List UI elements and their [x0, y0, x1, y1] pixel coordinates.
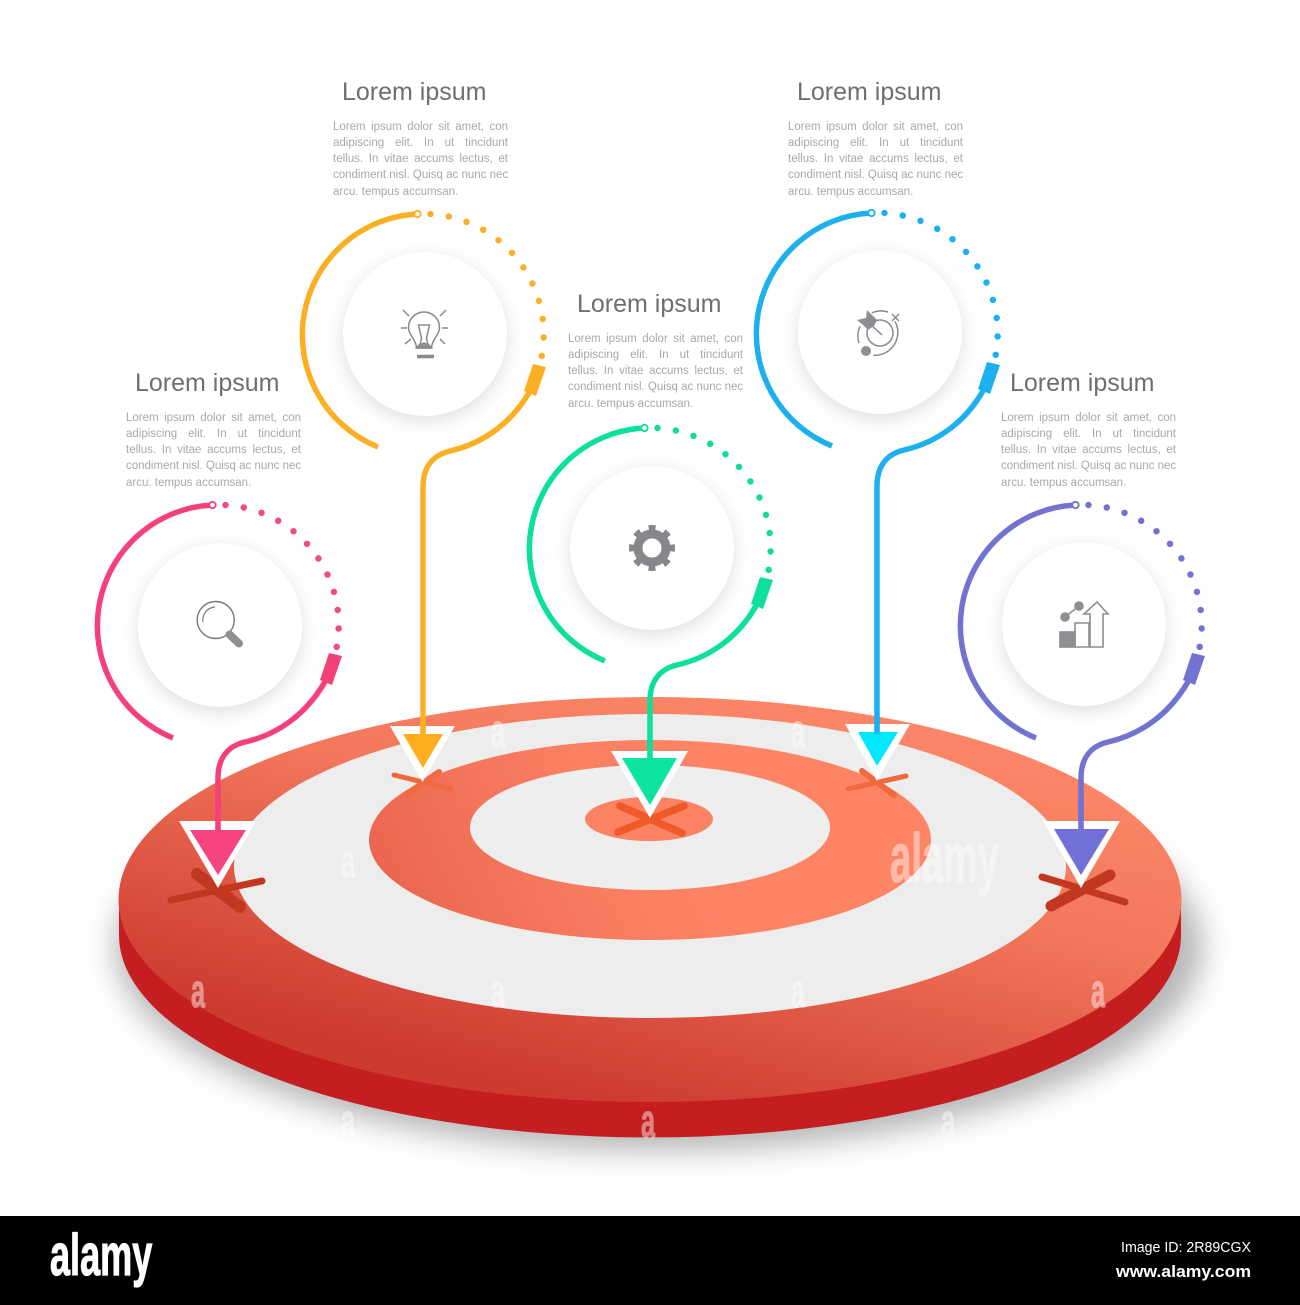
crosses on target	[171, 771, 1125, 907]
disc ground shadow	[115, 743, 1203, 1151]
dotted arc	[884, 213, 998, 356]
footer logo: alamy	[50, 1223, 152, 1288]
watermarks on disc: a	[641, 1096, 656, 1148]
text block: idea: adipiscing elit. In ut tincidunt	[333, 137, 508, 149]
text block: idea: condiment nisl. Quisq ac nunc nec	[333, 169, 508, 181]
text block: goal: Lorem ipsum dolor sit amet, con	[788, 120, 963, 132]
thick stub	[320, 653, 342, 685]
watermarks on disc: a	[941, 1096, 956, 1148]
icon: growth chart	[1060, 602, 1108, 647]
text block: goal: condiment nisl. Quisq ac nunc nec	[788, 169, 963, 181]
dotted arc	[430, 214, 544, 357]
watermarks on disc: a	[191, 966, 206, 1018]
website: www.alamy.com	[1115, 1262, 1251, 1281]
ring arc	[529, 428, 644, 661]
text block: settings: arcu. tempus accumsan.	[568, 398, 693, 410]
bullseye	[585, 797, 713, 841]
circle: settings	[570, 466, 734, 630]
thick stub	[751, 577, 773, 609]
cross: purple	[1042, 875, 1125, 906]
circle: idea	[343, 252, 507, 416]
text block: growth: adipiscing elit. In ut tincidunt	[1001, 428, 1176, 440]
pointer: orange	[302, 211, 546, 782]
text block: idea: tellus. In vitae accums lectus, et	[333, 153, 508, 165]
watermarks on disc: a	[1091, 966, 1106, 1018]
ring start node	[868, 210, 875, 216]
text block: search: adipiscing elit. In ut tincidunt	[126, 428, 301, 440]
text block: search: tellus. In vitae accums lectus, et	[126, 444, 301, 456]
pointer: purple	[960, 502, 1205, 888]
dotted arc	[658, 428, 771, 571]
image id: Image ID: 2R89CGX	[1121, 1239, 1251, 1256]
pointer: green	[529, 425, 773, 818]
circle shadow: goal	[797, 254, 963, 420]
text: Lorem ipsum	[135, 369, 280, 397]
watermarks on disc: a	[341, 1096, 356, 1148]
ring start node	[641, 425, 648, 431]
ring arc	[302, 214, 417, 447]
ring arc	[756, 213, 871, 446]
text: Lorem ipsum	[577, 290, 722, 318]
text block: search: condiment nisl. Quisq ac nunc nec	[126, 460, 301, 472]
text block: growth: Lorem ipsum dolor sit amet, con	[1001, 412, 1176, 424]
arrowhead	[179, 800, 256, 888]
watermarks on disc: a	[791, 706, 806, 758]
white ring	[234, 714, 1066, 1018]
text block: growth: condiment nisl. Quisq ac nunc nec	[1001, 460, 1176, 472]
circle: growth	[1002, 542, 1166, 706]
text block: settings: tellus. In vitae accums lectus, et	[568, 365, 743, 377]
connector line	[877, 389, 984, 735]
icon: magnifier	[197, 602, 239, 644]
ring start node	[1072, 502, 1079, 508]
disc outer ring	[118, 697, 1182, 1102]
connector line	[650, 604, 757, 765]
text block: search: arcu. tempus accumsan.	[126, 476, 251, 488]
target disc	[115, 697, 1203, 1151]
arrowhead	[845, 718, 910, 781]
icon: gear	[628, 524, 676, 572]
text block: idea: arcu. tempus accumsan.	[333, 186, 458, 198]
text block: goal: tellus. In vitae accums lectus, et	[788, 153, 963, 165]
watermarks on disc: alamy	[890, 819, 999, 897]
text block: settings: adipiscing elit. In ut tincidunt	[568, 349, 743, 361]
text block: settings: Lorem ipsum dolor sit amet, con	[568, 332, 743, 344]
connector line	[218, 680, 326, 835]
ring start node	[414, 211, 421, 217]
footer bar	[0, 1216, 1300, 1305]
text block: settings: condiment nisl. Quisq ac nunc nec	[568, 381, 743, 393]
circle shadow: idea	[342, 256, 508, 422]
arrowhead	[1043, 800, 1120, 888]
watermarks on disc	[191, 706, 1106, 1148]
thick stub	[524, 364, 546, 396]
pointer: pink	[97, 502, 342, 888]
text block: settings	[568, 290, 743, 410]
cross: pink	[171, 874, 262, 907]
text block: growth	[1001, 369, 1176, 488]
text block: idea: Lorem ipsum dolor sit amet, con	[333, 120, 508, 132]
circle shadow: settings	[569, 470, 735, 636]
text block: search: Lorem ipsum dolor sit amet, con	[126, 412, 301, 424]
icon: light bulb	[401, 310, 448, 356]
disc side wall	[119, 899, 1181, 1137]
text: Lorem ipsum	[342, 78, 486, 106]
text block: growth: arcu. tempus accumsan.	[1001, 476, 1126, 488]
watermarks on disc: a	[341, 836, 356, 888]
thick stub	[978, 362, 1000, 394]
text block: goal: adipiscing elit. In ut tincidunt	[788, 137, 963, 149]
circle shadow: search	[137, 547, 303, 713]
text: Lorem ipsum	[797, 78, 942, 106]
white circles	[137, 250, 1167, 713]
thick stub	[1183, 653, 1205, 685]
arrowhead	[611, 740, 688, 818]
middle red ring	[369, 740, 931, 940]
text block: idea	[333, 78, 508, 198]
ring start node	[209, 502, 216, 508]
cross: blue	[848, 771, 906, 795]
text block: goal: arcu. tempus accumsan.	[788, 186, 913, 198]
circle: search	[138, 543, 302, 707]
text block: goal	[788, 78, 963, 198]
watermarks on disc: a	[791, 966, 806, 1018]
ring arc	[97, 505, 212, 738]
watermarks on disc: a	[491, 706, 506, 758]
watermarks on disc: a	[491, 966, 506, 1018]
cross: orange	[394, 772, 451, 794]
icon: goal target	[857, 310, 899, 356]
text: Lorem ipsum	[1010, 369, 1154, 397]
cross: green	[618, 806, 684, 833]
circle: goal	[798, 250, 962, 414]
ring arc	[960, 505, 1075, 738]
connector line	[1081, 680, 1189, 835]
inner white ring	[470, 765, 830, 890]
circle shadow: growth	[1001, 546, 1167, 712]
connector line	[423, 391, 530, 736]
pointer: blue	[756, 210, 1000, 781]
dotted arc	[226, 505, 339, 648]
arrowhead	[390, 720, 455, 782]
text block: growth: tellus. In vitae accums lectus, et	[1001, 444, 1176, 456]
text block: search	[126, 369, 301, 488]
dotted arc	[1088, 505, 1202, 648]
